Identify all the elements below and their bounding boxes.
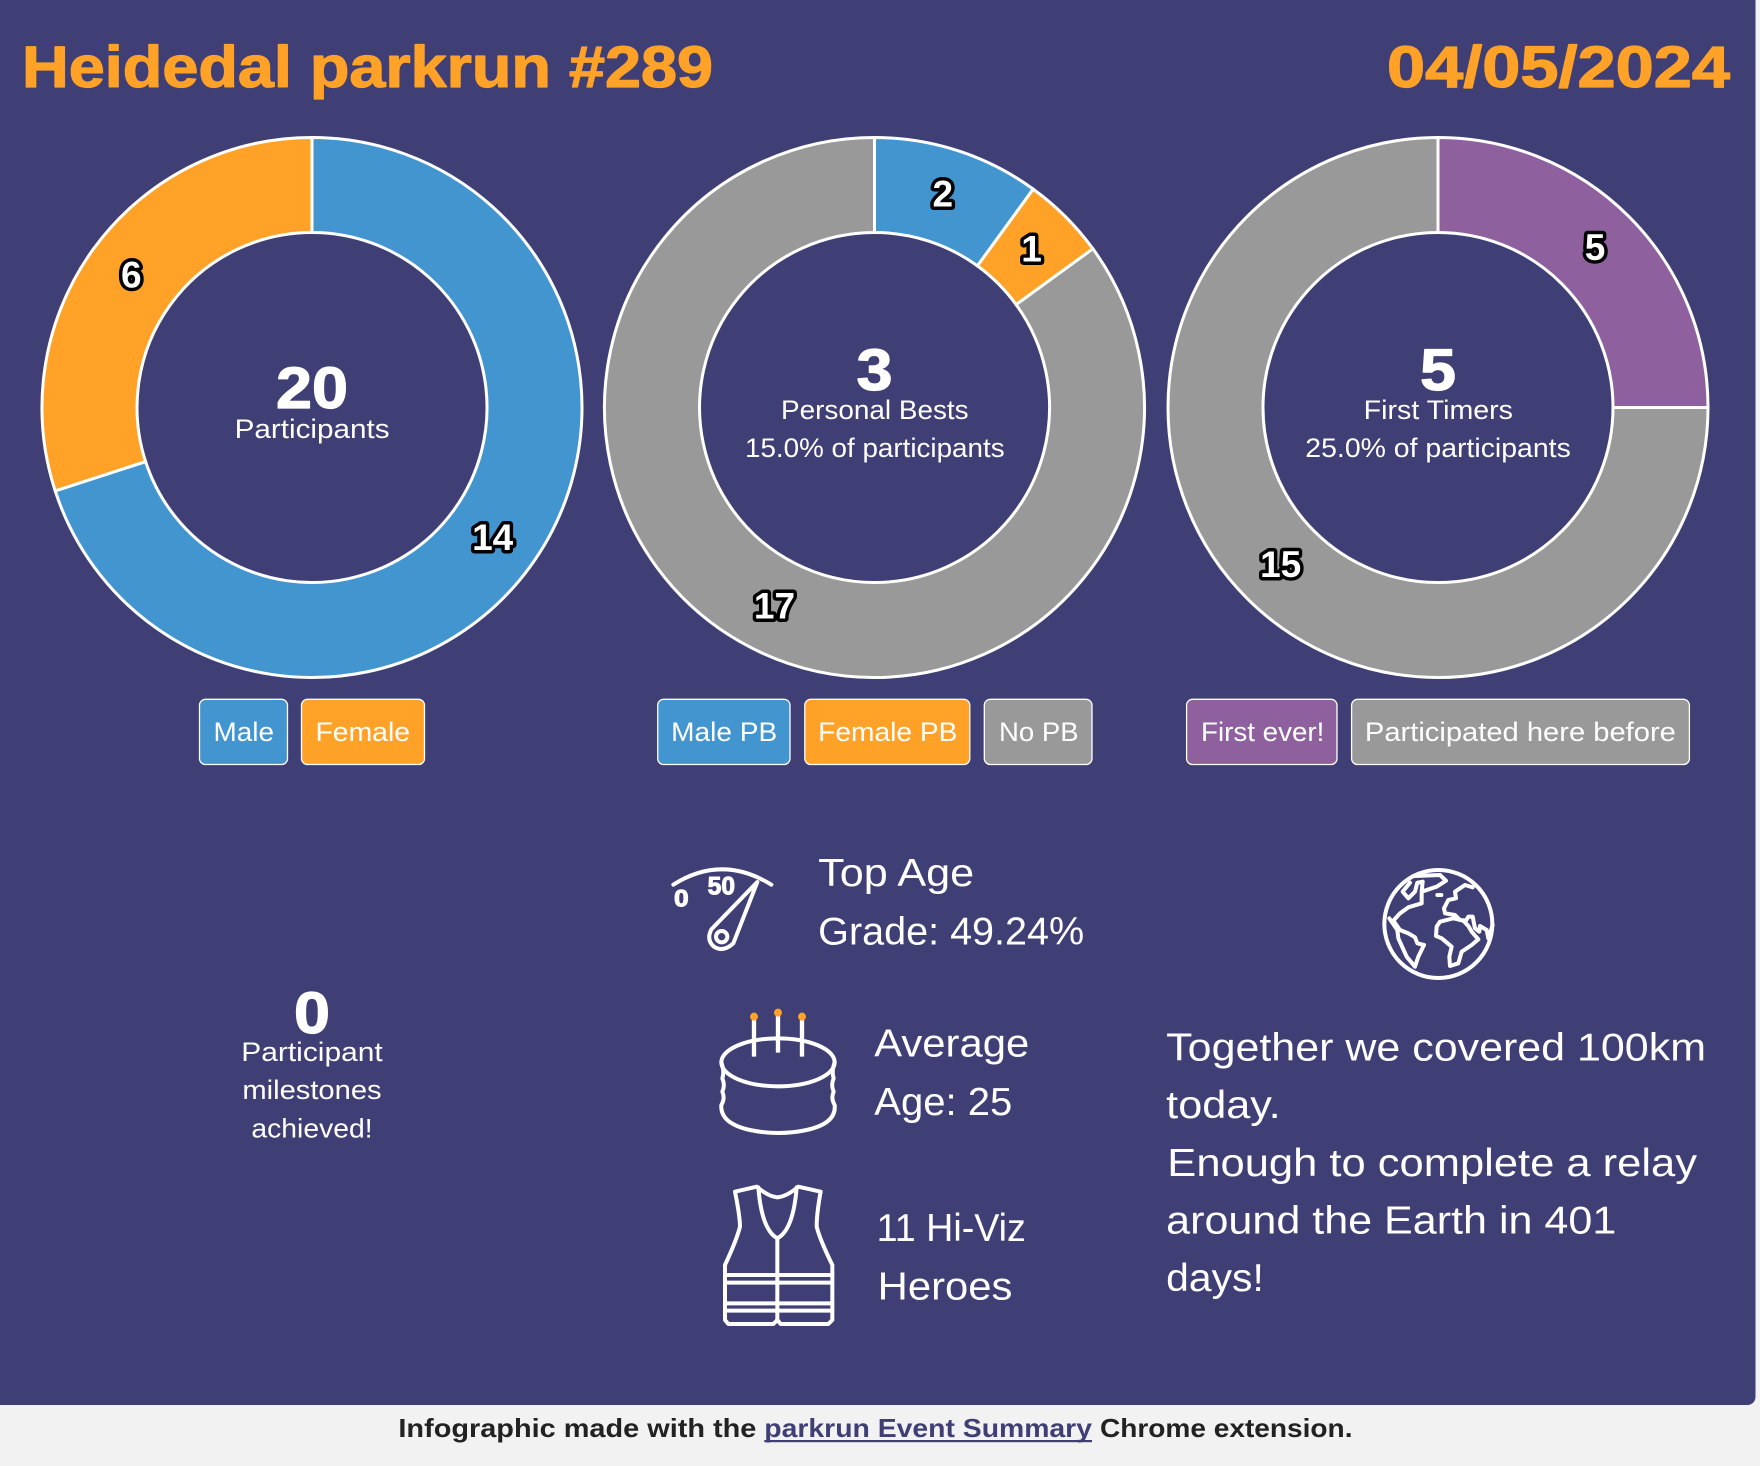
panel: personal bests donut [604,138,1144,678]
donut segment: female [42,138,312,491]
centre number: participants: 20 [276,356,348,421]
text: hi-viz heroes [877,1207,1026,1308]
text: distance covered: today. [1166,1084,1281,1127]
text: distance covered: Together we covered 100km [1166,1027,1706,1070]
legend item: female [302,699,424,764]
legend: participants [200,699,424,764]
icon: hi-viz vest [725,1187,832,1324]
legend item: participated here before [1352,699,1689,764]
footer credit: parkrun Event Summary [764,1413,1093,1443]
text: distance covered: around the Earth in 401 [1166,1200,1616,1242]
text: top age grade: Grade: 49.24% [818,910,1084,954]
legend: first timers: Participated here before [1365,717,1676,747]
title: Heidedal parkrun #289 [22,35,713,100]
text: distance covered: Enough to complete a relay [1167,1142,1698,1185]
legend item: male PB [658,699,790,764]
donut segment: returning [1168,138,1708,678]
milestones caption: milestones [242,1075,382,1105]
milestones caption: achieved! [251,1114,373,1144]
text: average age: Age: 25 [874,1081,1012,1124]
icon: globe [1384,870,1493,978]
value label: no PB: 17 [754,586,795,626]
footer credit [398,1413,1352,1443]
value label: first ever: 5 [1585,227,1605,268]
text block: milestones [241,981,390,1144]
donut segment: first ever [1438,138,1708,408]
legend item: female PB [805,699,970,764]
milestones caption: Participant [241,1037,383,1067]
centre caption: first timers: First Timers [1364,395,1513,425]
legend item: no PB [984,699,1092,764]
icon: gauge: 0 [674,886,689,913]
legend: personal bests: Male PB [671,717,777,747]
value label: returning: 15 [1260,544,1301,585]
donut segment: male PB [874,138,1033,266]
centre caption: PB share: 15.0% of participants [745,433,1005,463]
legend: participants: Male [214,717,274,747]
donut segment: female PB [977,189,1093,305]
text: hi-viz heroes: 11 Hi-Viz [877,1207,1026,1250]
centre number: first timers: 5 [1420,338,1456,403]
panel: first timers donut [1168,138,1708,678]
legend: participants: Female [316,717,410,747]
text: average age [874,1022,1029,1124]
icon: birthday cake [721,1009,835,1133]
centre caption: personal bests: Personal Bests [781,395,969,425]
legend item: male [200,699,288,764]
centre caption: first timer share: 25.0% of participants [1305,433,1571,463]
value label: male: 14 [472,517,514,558]
footer credit: Infographic made with the [398,1413,756,1443]
text: distance covered: days! [1166,1257,1264,1300]
legend: first timers [1187,699,1689,764]
legend item: first ever [1187,699,1337,764]
panel: participants donut [42,138,582,678]
legend: personal bests: Female PB [818,717,957,747]
icon: gauge: 50 [708,872,735,900]
legend: first timers: First ever! [1201,717,1324,747]
icon: gauge [673,869,771,949]
text: top age grade: Top Age [818,852,974,895]
milestones number: 0 [294,981,330,1046]
footer credit: Chrome extension. [1100,1413,1352,1443]
text: hi-viz heroes: Heroes [878,1266,1012,1308]
value label: female: 6 [121,254,142,296]
date: 04/05/2024 [1387,35,1730,100]
text: average age: Average [874,1022,1029,1066]
legend: personal bests: No PB [999,717,1079,747]
text: top age grade [818,852,1084,954]
value label: female PB: 1 [1021,228,1042,270]
value label: male PB: 2 [933,174,953,214]
centre caption: participants: Participants [235,414,390,444]
legend: personal bests [658,699,1092,764]
donut segment: no PB [604,138,1144,678]
centre number: personal bests: 3 [856,338,892,403]
donut segment: male [55,138,582,678]
